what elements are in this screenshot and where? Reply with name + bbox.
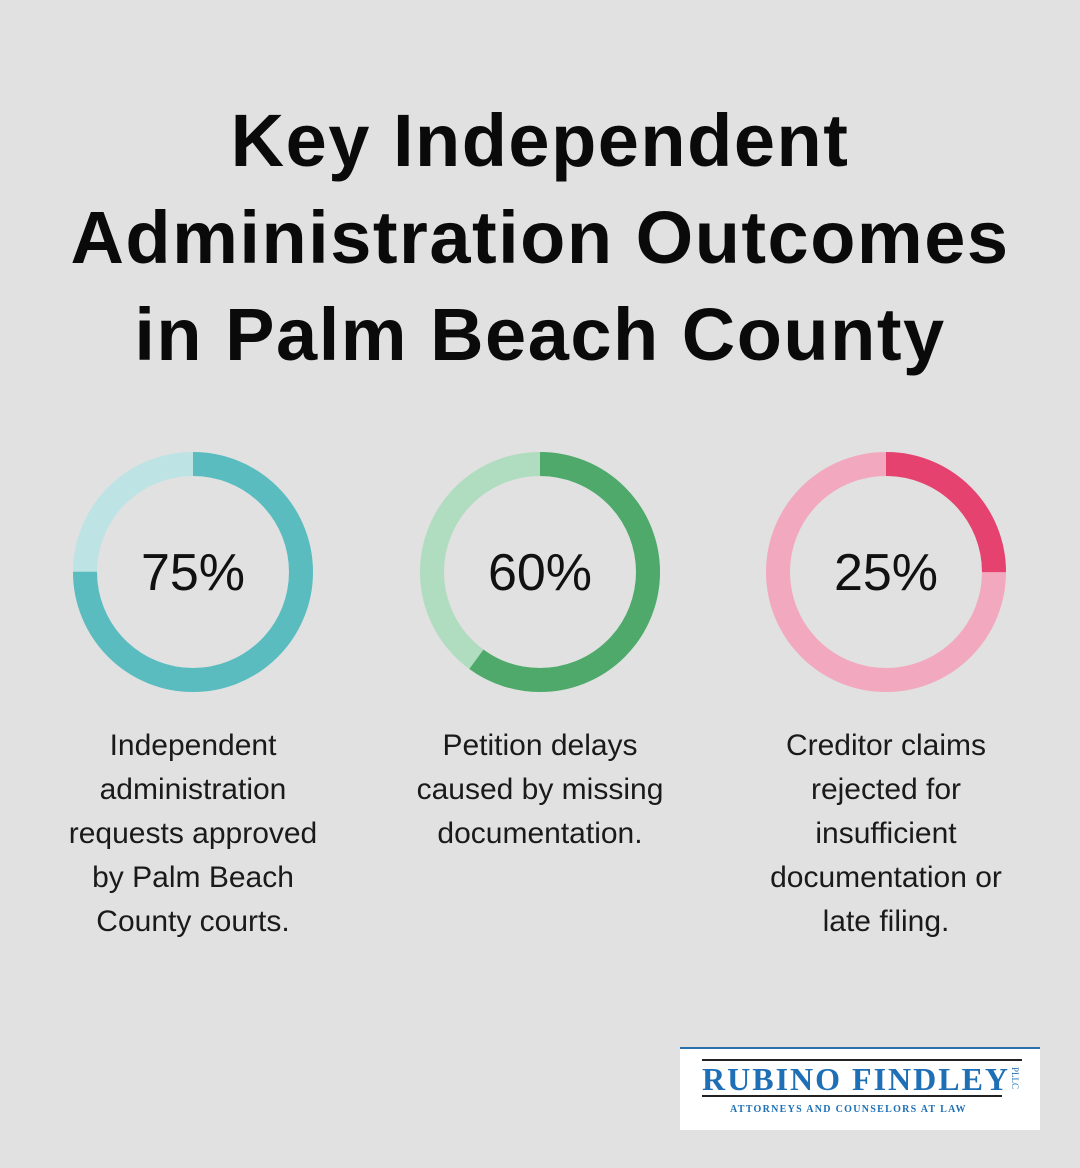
logo [680,1047,1040,1130]
title: Key Independent [231,99,849,182]
title: in Palm Beach County [134,293,946,376]
ring: 75%: 75% [141,544,245,602]
logo: RUBINO FINDLEY [702,1061,1010,1097]
logo: ATTORNEYS AND COUNSELORS AT LAW [730,1104,967,1115]
label: 60%: Petition delays caused by missing documentation. [417,729,663,850]
title [70,99,1010,376]
ring: 75% [73,452,313,692]
ring: 25%: 25% [834,544,938,602]
ring: 60% [420,452,660,692]
logo: PLLC [1010,1067,1020,1089]
label: 25%: Creditor claims rejected for insufficient documentation or late filing. [770,729,1002,938]
ring: 25% [766,452,1006,692]
ring: 60%: 60% [488,544,592,602]
title: Administration Outcomes [70,196,1010,279]
label: 75%: Independent administration requests approved by Palm Beach County courts. [69,729,317,938]
